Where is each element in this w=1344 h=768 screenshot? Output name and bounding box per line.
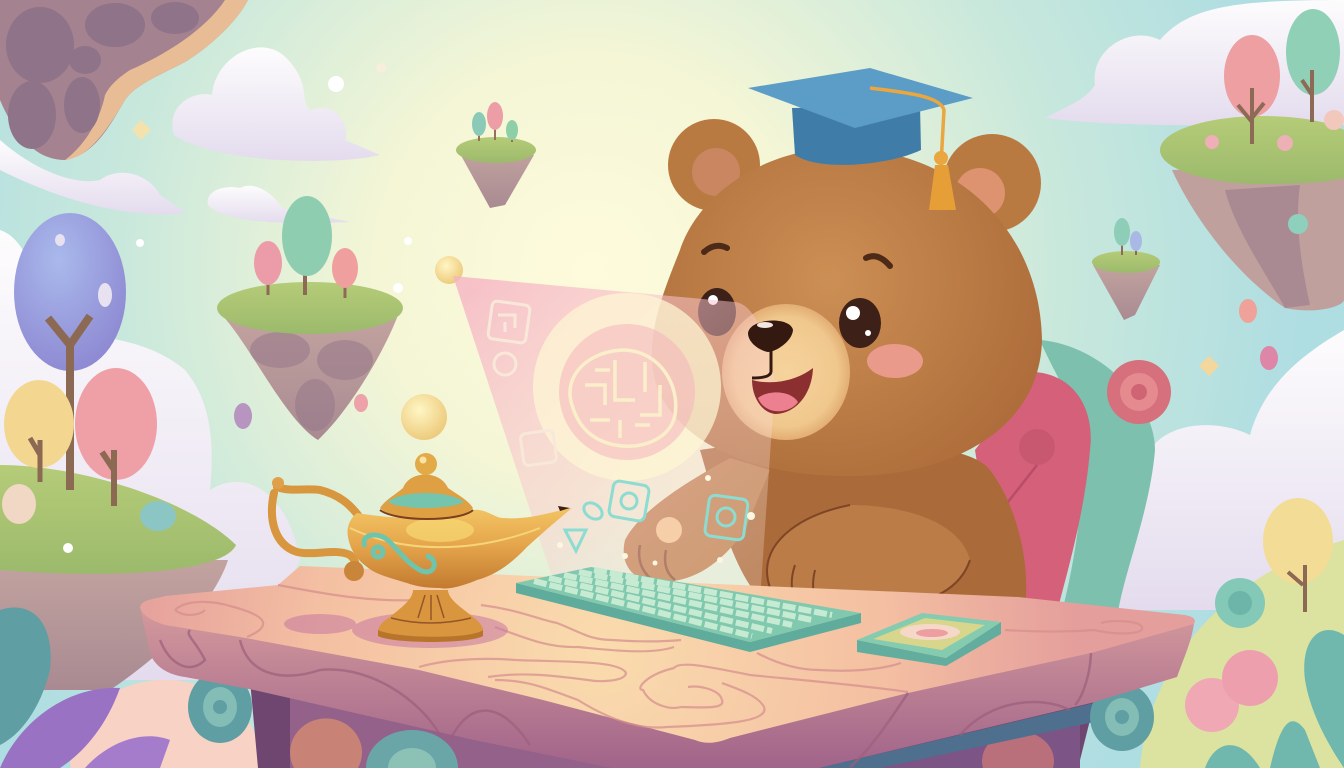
hologram screen (453, 276, 775, 600)
bear blush (867, 344, 923, 378)
magic lamp (272, 453, 572, 648)
floating island: top right (1160, 9, 1344, 310)
lamp shadow (284, 612, 508, 648)
brain (570, 350, 676, 446)
desk scroll ends (188, 671, 1154, 751)
desk side carving (160, 630, 1091, 767)
desk top (140, 566, 1195, 743)
bear nose (748, 321, 793, 378)
decorative orbs and gems (63, 63, 1308, 553)
desk side band (140, 607, 1194, 768)
desk (140, 566, 1195, 768)
bear mouth (752, 368, 813, 414)
bear ears (668, 119, 1041, 232)
sparkles (557, 475, 755, 566)
floating island: small top (456, 102, 536, 208)
tablet (857, 613, 1001, 666)
lamp lid (380, 453, 473, 519)
lamp swirl (364, 535, 434, 572)
icons on the screen (488, 301, 557, 466)
wood grain (175, 585, 1142, 728)
floating island: small right (1092, 218, 1160, 320)
foreground leaves (0, 608, 170, 768)
bear left arm and paw (624, 458, 770, 582)
lamp foot (378, 590, 483, 640)
bear (624, 119, 1042, 607)
keyboard (516, 567, 861, 652)
top-left floating rock (0, 0, 248, 160)
pink ground, lower left (70, 680, 260, 768)
desk base (250, 680, 1100, 768)
bear body (700, 441, 1026, 605)
floating island: middle left (217, 196, 403, 440)
bear eyes (698, 288, 881, 348)
chair (975, 340, 1171, 612)
lamp handle (272, 487, 358, 574)
bear muzzle (722, 304, 850, 440)
lamp body (347, 508, 572, 588)
bear right arm and paw (767, 505, 970, 607)
left island with trees (0, 213, 236, 690)
bear head (652, 148, 1042, 476)
graduation cap (748, 68, 973, 210)
right hill with tree and swirl (1140, 498, 1344, 768)
glowing ring (533, 293, 721, 481)
